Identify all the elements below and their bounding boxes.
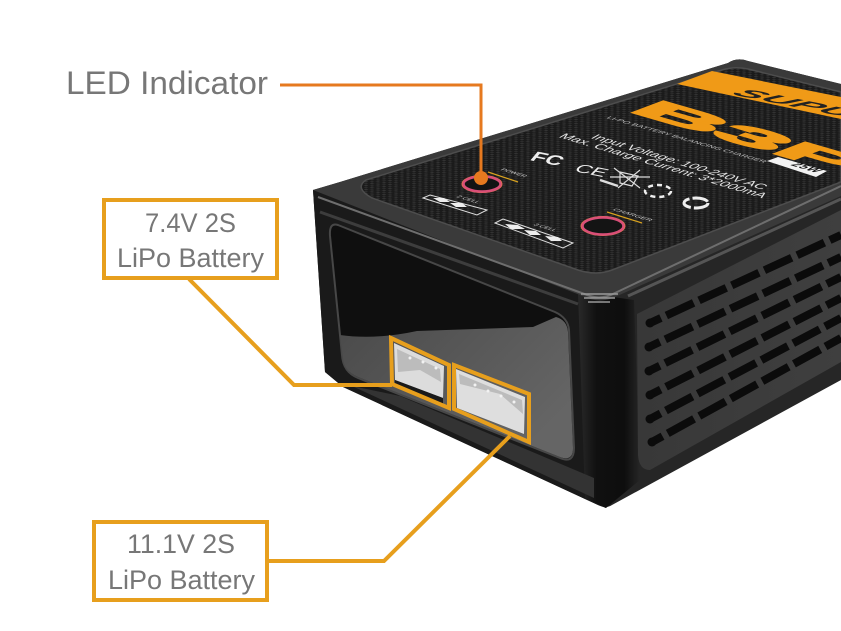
body silhouette xyxy=(313,59,841,507)
icon: CE mark: CE xyxy=(571,161,613,179)
panel text: charger type: LI-PO BATTERY BALANCING CHARGER xyxy=(604,116,768,164)
icon: recycling bin cross xyxy=(600,168,650,188)
charger LED xyxy=(581,208,655,236)
front panel reflection xyxy=(340,317,573,458)
front left corner band xyxy=(313,190,606,508)
icon: recycle arrow xyxy=(684,198,708,208)
carbon fibre top panel xyxy=(361,68,841,273)
bottom lip xyxy=(352,386,594,498)
vent slot rounded ends xyxy=(644,318,656,446)
brand band xyxy=(677,71,841,119)
title: LED Indicator: LED Indicator xyxy=(66,65,268,101)
highlight frame: 3S port xyxy=(454,365,529,442)
front recessed panel xyxy=(330,224,574,460)
highlight frame: 2S port xyxy=(391,338,449,408)
callout: 7.4V 2S LiPo Battery: LiPo Battery xyxy=(117,243,264,273)
panel text: charge current: Max. Charge Current: 3*2000mA xyxy=(556,132,772,200)
brand name: SUPU xyxy=(725,87,841,119)
arrow: 2S leader line xyxy=(189,279,392,385)
callout: 11.1V 2S LiPo Battery: LiPo Battery xyxy=(108,565,255,595)
arrow: 3S leader line xyxy=(267,436,510,561)
power LED: POWER xyxy=(498,168,529,178)
callout: 7.4V 2S LiPo Battery xyxy=(104,200,277,278)
3 cell indicator xyxy=(495,219,573,248)
icon: FCC mark: FC xyxy=(526,149,568,169)
25W badge xyxy=(767,157,827,177)
panel text: input voltage: Input Voltage: 100-240V AC xyxy=(588,133,772,191)
arrow: LED leader line xyxy=(280,85,488,185)
charger body xyxy=(313,59,841,508)
2 cell indicator: 2 CELL xyxy=(454,195,482,204)
2 cell indicator xyxy=(423,195,487,215)
charger LED: CHARGER xyxy=(610,208,655,222)
callout: 7.4V 2S LiPo Battery: 7.4V 2S xyxy=(145,208,236,238)
connector: 3S port xyxy=(456,369,525,434)
icon: dotted circle xyxy=(645,185,671,197)
front corner post xyxy=(578,292,640,508)
corner screw highlight xyxy=(581,294,618,302)
25W badge: 25W xyxy=(787,161,827,174)
right side face xyxy=(637,210,841,470)
callout: 11.1V 2S LiPo Battery: 11.1V 2S xyxy=(127,529,235,559)
model name: B3P xyxy=(617,96,841,177)
top bezel xyxy=(313,59,841,301)
3 cell indicator: 3 CELL xyxy=(531,223,559,232)
connector: 2S port xyxy=(394,343,444,405)
power LED xyxy=(462,168,529,192)
vent slots xyxy=(649,235,841,442)
callout: 11.1V 2S LiPo Battery xyxy=(94,522,267,600)
